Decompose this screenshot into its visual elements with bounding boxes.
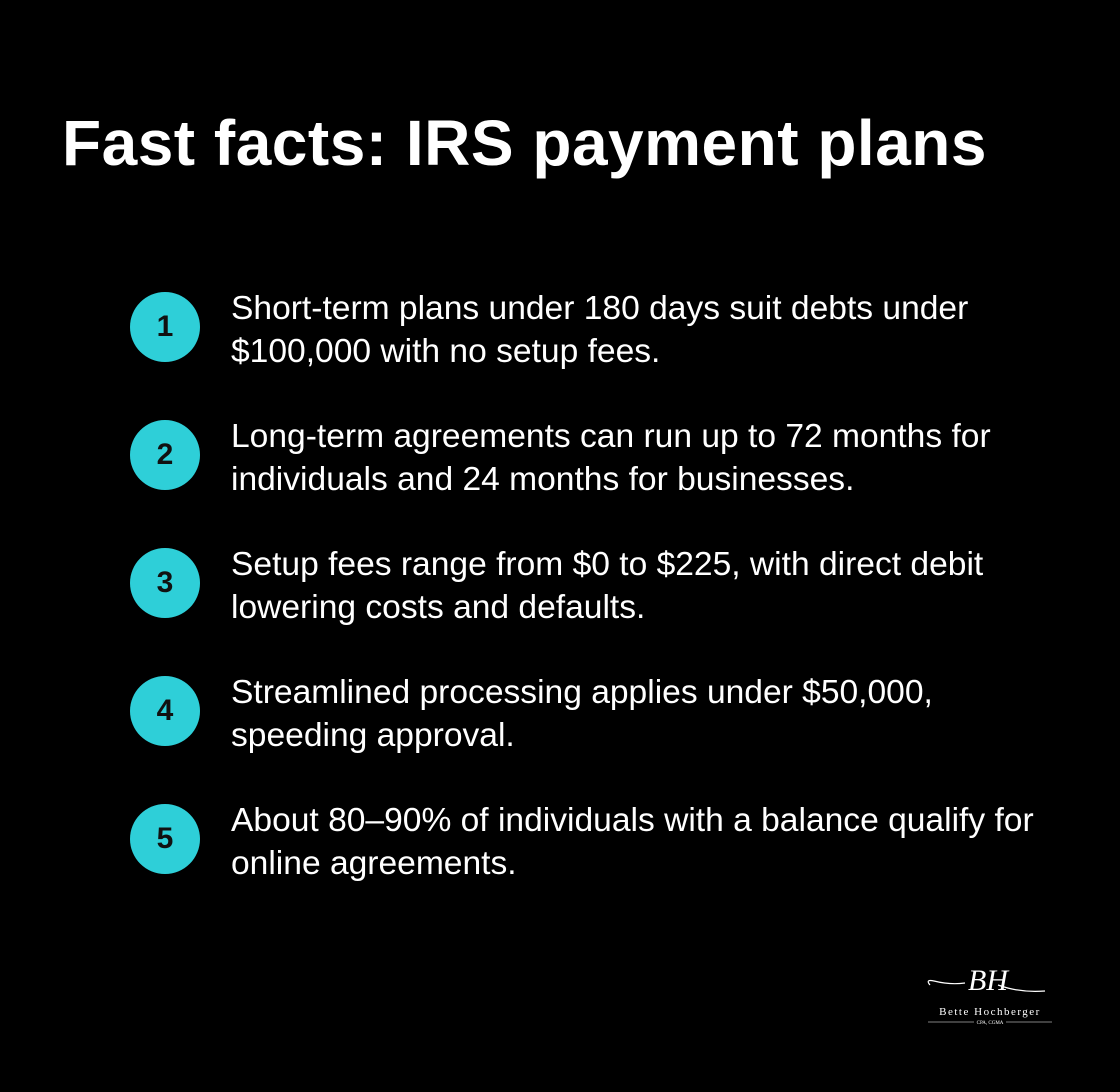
- number badge 2: [130, 420, 200, 490]
- number badge 3: [130, 548, 200, 618]
- text 5: [231, 802, 1034, 882]
- number badge 4: 4: [157, 694, 173, 727]
- text 1: $100,000 with no setup fees.: [231, 333, 660, 370]
- item 5: [130, 802, 1034, 882]
- item 4: [130, 674, 933, 754]
- text 5: online agreements.: [231, 845, 517, 882]
- number badge 5: 5: [157, 822, 173, 855]
- text 1: Short-term plans under 180 days suit debts under: [231, 290, 968, 327]
- number badge 2: 2: [157, 438, 173, 471]
- text 4: [231, 674, 933, 754]
- number badge 4: [130, 676, 200, 746]
- item 1: [130, 290, 968, 370]
- number badge 3: 3: [157, 566, 173, 599]
- logo: Bette Hochberger: [939, 1006, 1041, 1018]
- item 2: [130, 418, 991, 498]
- text 2: individuals and 24 months for businesses.: [231, 461, 854, 498]
- text 2: [231, 418, 991, 498]
- text 2: Long-term agreements can run up to 72 months for: [231, 418, 991, 455]
- text 4: Streamlined processing applies under $50,000,: [231, 674, 933, 711]
- logo: BH: [968, 964, 1010, 997]
- text 3: lowering costs and defaults.: [231, 589, 645, 626]
- text 3: [231, 546, 983, 626]
- logo: [928, 964, 1052, 1025]
- number badge 1: [130, 292, 200, 362]
- number badge 5: [130, 804, 200, 874]
- number badge 1: 1: [157, 310, 173, 343]
- text 4: speeding approval.: [231, 717, 515, 754]
- text 3: Setup fees range from $0 to $225, with direct debit: [231, 546, 983, 583]
- item 3: [130, 546, 983, 626]
- text 1: [231, 290, 968, 370]
- title: Fast facts: IRS payment plans: [62, 107, 987, 179]
- text 5: About 80–90% of individuals with a balance qualify for: [231, 802, 1034, 839]
